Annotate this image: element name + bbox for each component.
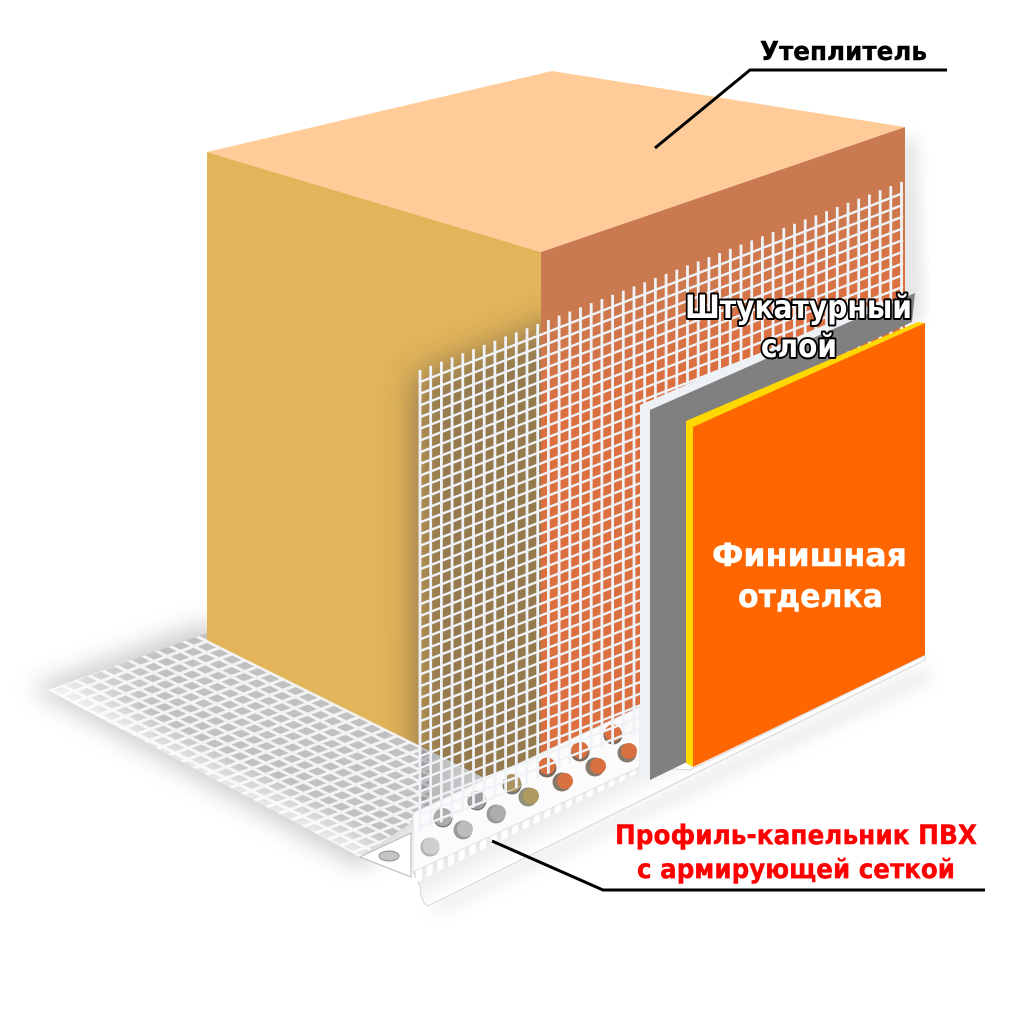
insulation: right face xyxy=(541,127,905,806)
insulation: top face xyxy=(207,71,905,252)
label: plaster layer: слой xyxy=(761,327,837,365)
label: insulation: Утеплитель xyxy=(760,37,927,67)
label: finish coat: Финишная xyxy=(712,536,907,574)
flange hole xyxy=(379,851,399,861)
label: finish coat: отделка xyxy=(738,577,883,615)
mesh shadow on block xyxy=(395,306,541,777)
floor shade under mesh xyxy=(420,745,541,822)
band holes xyxy=(420,724,637,856)
right shadow xyxy=(900,135,922,330)
finish layer: orange panel xyxy=(693,323,925,767)
insulation: left face xyxy=(207,152,541,806)
reinforcing mesh xyxy=(420,182,903,840)
floor shadow xyxy=(30,622,930,912)
label: drip profile: с армирующей сеткой xyxy=(637,854,955,885)
finish layer: yellow edge xyxy=(686,322,925,767)
plaster layer: gray xyxy=(650,293,915,780)
plaster layer: white edge xyxy=(640,300,888,780)
profile teeth xyxy=(413,765,640,884)
leader: insulation xyxy=(655,70,947,148)
label: finish coat xyxy=(712,536,907,615)
label: plaster layer xyxy=(685,288,912,365)
label: plaster layer: Штукатурный xyxy=(685,288,912,326)
label: drip profile xyxy=(615,820,977,885)
leader: drip profile xyxy=(492,841,985,890)
profile perforated band xyxy=(413,707,640,872)
label: drip profile: Профиль-капельник ПВХ xyxy=(615,820,977,851)
profile lip xyxy=(413,655,925,906)
floor mesh xyxy=(48,633,430,856)
profile flange xyxy=(360,833,411,877)
